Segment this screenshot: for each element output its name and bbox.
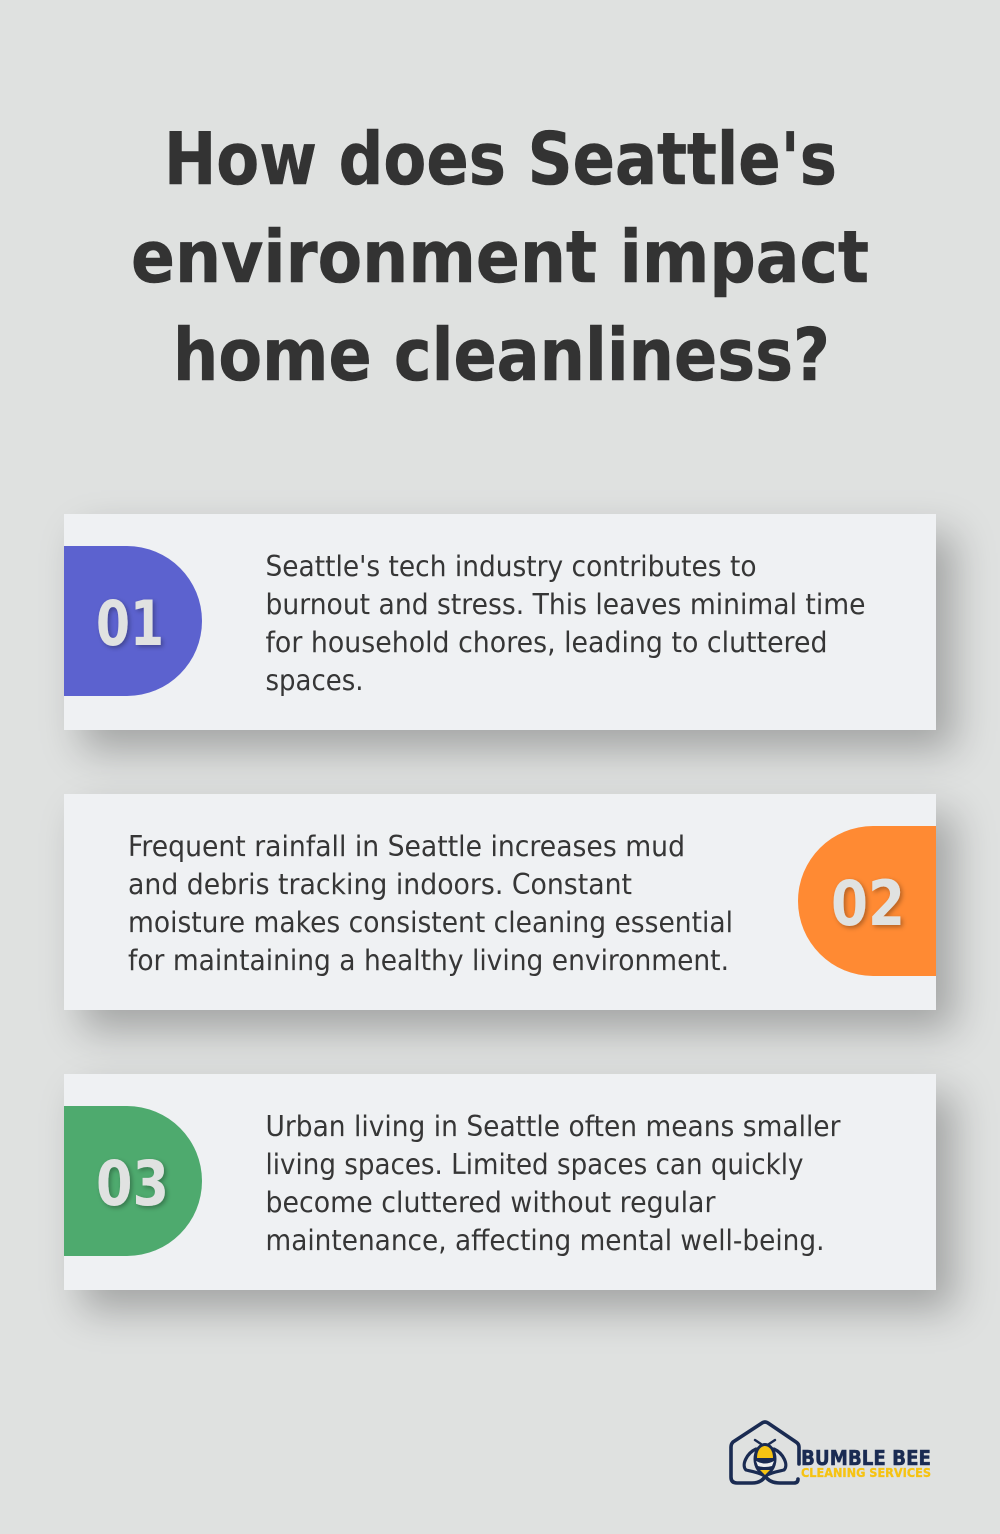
text: card 3 body: become cluttered without regular bbox=[266, 1185, 716, 1219]
text: card 3 body bbox=[266, 1109, 841, 1257]
badge: 03: 03 bbox=[96, 1147, 169, 1220]
text: card 2 body: and debris tracking indoors. Constant bbox=[128, 867, 632, 901]
text: card 1 body: spaces. bbox=[266, 663, 364, 697]
badge: 02 bbox=[798, 826, 936, 976]
logo: Bumble Bee Cleaning Services bbox=[731, 1422, 931, 1483]
text: card 1 body bbox=[266, 549, 866, 697]
text: card 1 body: Seattle's tech industry contributes to bbox=[266, 549, 756, 583]
panel: card 2 bbox=[64, 794, 936, 1010]
text: card 1 body: for household chores, leading to cluttered bbox=[266, 625, 828, 659]
text: card 2 body: for maintaining a healthy living environment. bbox=[128, 943, 729, 977]
title: environment impact bbox=[131, 215, 869, 299]
title: How does Seattle's bbox=[164, 117, 837, 201]
icon: house outline with bee bbox=[731, 1422, 799, 1483]
panel: card 3 bbox=[64, 1074, 936, 1290]
text: card 3 body: Urban living in Seattle often means smaller bbox=[266, 1109, 841, 1143]
badge: 03 bbox=[64, 1106, 202, 1256]
icon: bee body bbox=[754, 1443, 776, 1475]
text: card 2 body: Frequent rainfall in Seattle increases mud bbox=[128, 829, 685, 863]
text: card 2 body: moisture makes consistent cleaning essential bbox=[128, 905, 733, 939]
text: card 2 body bbox=[128, 829, 733, 977]
text: card 1 body: burnout and stress. This leaves minimal time bbox=[266, 587, 866, 621]
title bbox=[131, 117, 869, 397]
badge: 01 bbox=[64, 546, 202, 696]
panel: card 1 bbox=[64, 514, 936, 730]
logo tagline: CLEANING SERVICES bbox=[801, 1466, 931, 1480]
title: home cleanliness? bbox=[173, 313, 830, 397]
badge: 01: 01 bbox=[96, 587, 164, 660]
badge: 02: 02 bbox=[831, 867, 905, 940]
logo wordmark: BUMBLE BEE bbox=[801, 1446, 931, 1470]
text: card 3 body: living spaces. Limited spaces can quickly bbox=[266, 1147, 804, 1181]
text: card 3 body: maintenance, affecting mental well-being. bbox=[266, 1223, 824, 1257]
